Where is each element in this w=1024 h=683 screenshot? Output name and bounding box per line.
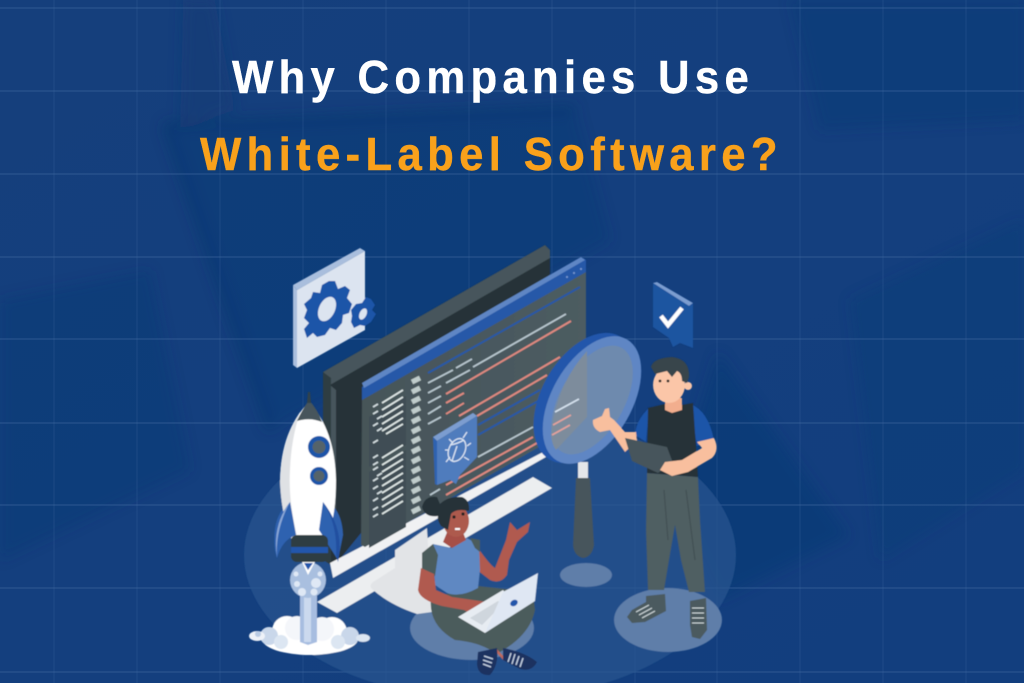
icon: gear panel [293, 248, 376, 368]
tablet [625, 438, 673, 473]
rocket shadow fins [325, 500, 343, 560]
woman left shoe [477, 648, 497, 675]
rocket collar [291, 535, 328, 562]
code lines: marker column [412, 378, 420, 512]
screen [361, 270, 586, 547]
woman [418, 497, 538, 675]
floor spot: magnifier [560, 563, 612, 587]
man left shoe [627, 594, 666, 623]
rocket [249, 392, 370, 655]
woman shirt [433, 538, 480, 595]
code lines: pink [446, 321, 571, 495]
monitor stand [370, 528, 432, 614]
magnifying glass [512, 315, 662, 558]
icon: bug panel [433, 413, 477, 485]
floor spot: woman [410, 596, 534, 660]
magnifier neck [578, 462, 588, 482]
floor ellipse [244, 410, 736, 683]
rocket windows [308, 436, 330, 458]
illustration [244, 245, 736, 683]
man right shoe [690, 598, 707, 639]
title line 1: Why Companies Use [232, 51, 749, 103]
woman legs [431, 586, 535, 652]
lens front ring [522, 319, 662, 481]
icon: check badge [653, 282, 693, 348]
magnifier handle [573, 478, 594, 558]
keyboard bar [317, 477, 552, 613]
lens glass [534, 332, 650, 468]
title [200, 51, 778, 180]
man [593, 357, 717, 639]
screen header [362, 258, 586, 400]
man trousers [646, 473, 705, 592]
rocket body [280, 402, 336, 540]
woman neck and head [443, 530, 466, 548]
man neck and head [665, 398, 682, 413]
monitor frame [323, 245, 550, 565]
title line 2: White-Label Software? [200, 128, 778, 180]
monitor chin bar [330, 452, 546, 578]
lens back ring [512, 315, 658, 481]
code lines: blue [428, 287, 580, 435]
woman right arm [477, 522, 530, 582]
code lines: left column [382, 390, 403, 514]
code side panel [369, 396, 406, 467]
monitor [317, 245, 586, 614]
man vest [647, 403, 698, 477]
man sleeves [635, 408, 649, 442]
rocket exhaust [290, 562, 326, 645]
laptop [458, 573, 538, 633]
floor spot: man [614, 588, 722, 652]
rocket fins [274, 502, 296, 558]
woman left arm and hand [418, 568, 488, 615]
woman right shoe [503, 648, 537, 670]
code lines: grey [428, 314, 566, 495]
man left arm and thumb [593, 408, 637, 452]
rocket nose [297, 400, 322, 422]
man right arm [660, 438, 717, 476]
exhaust cloud [249, 616, 370, 655]
woman hair [422, 497, 469, 530]
man hair [651, 357, 689, 383]
